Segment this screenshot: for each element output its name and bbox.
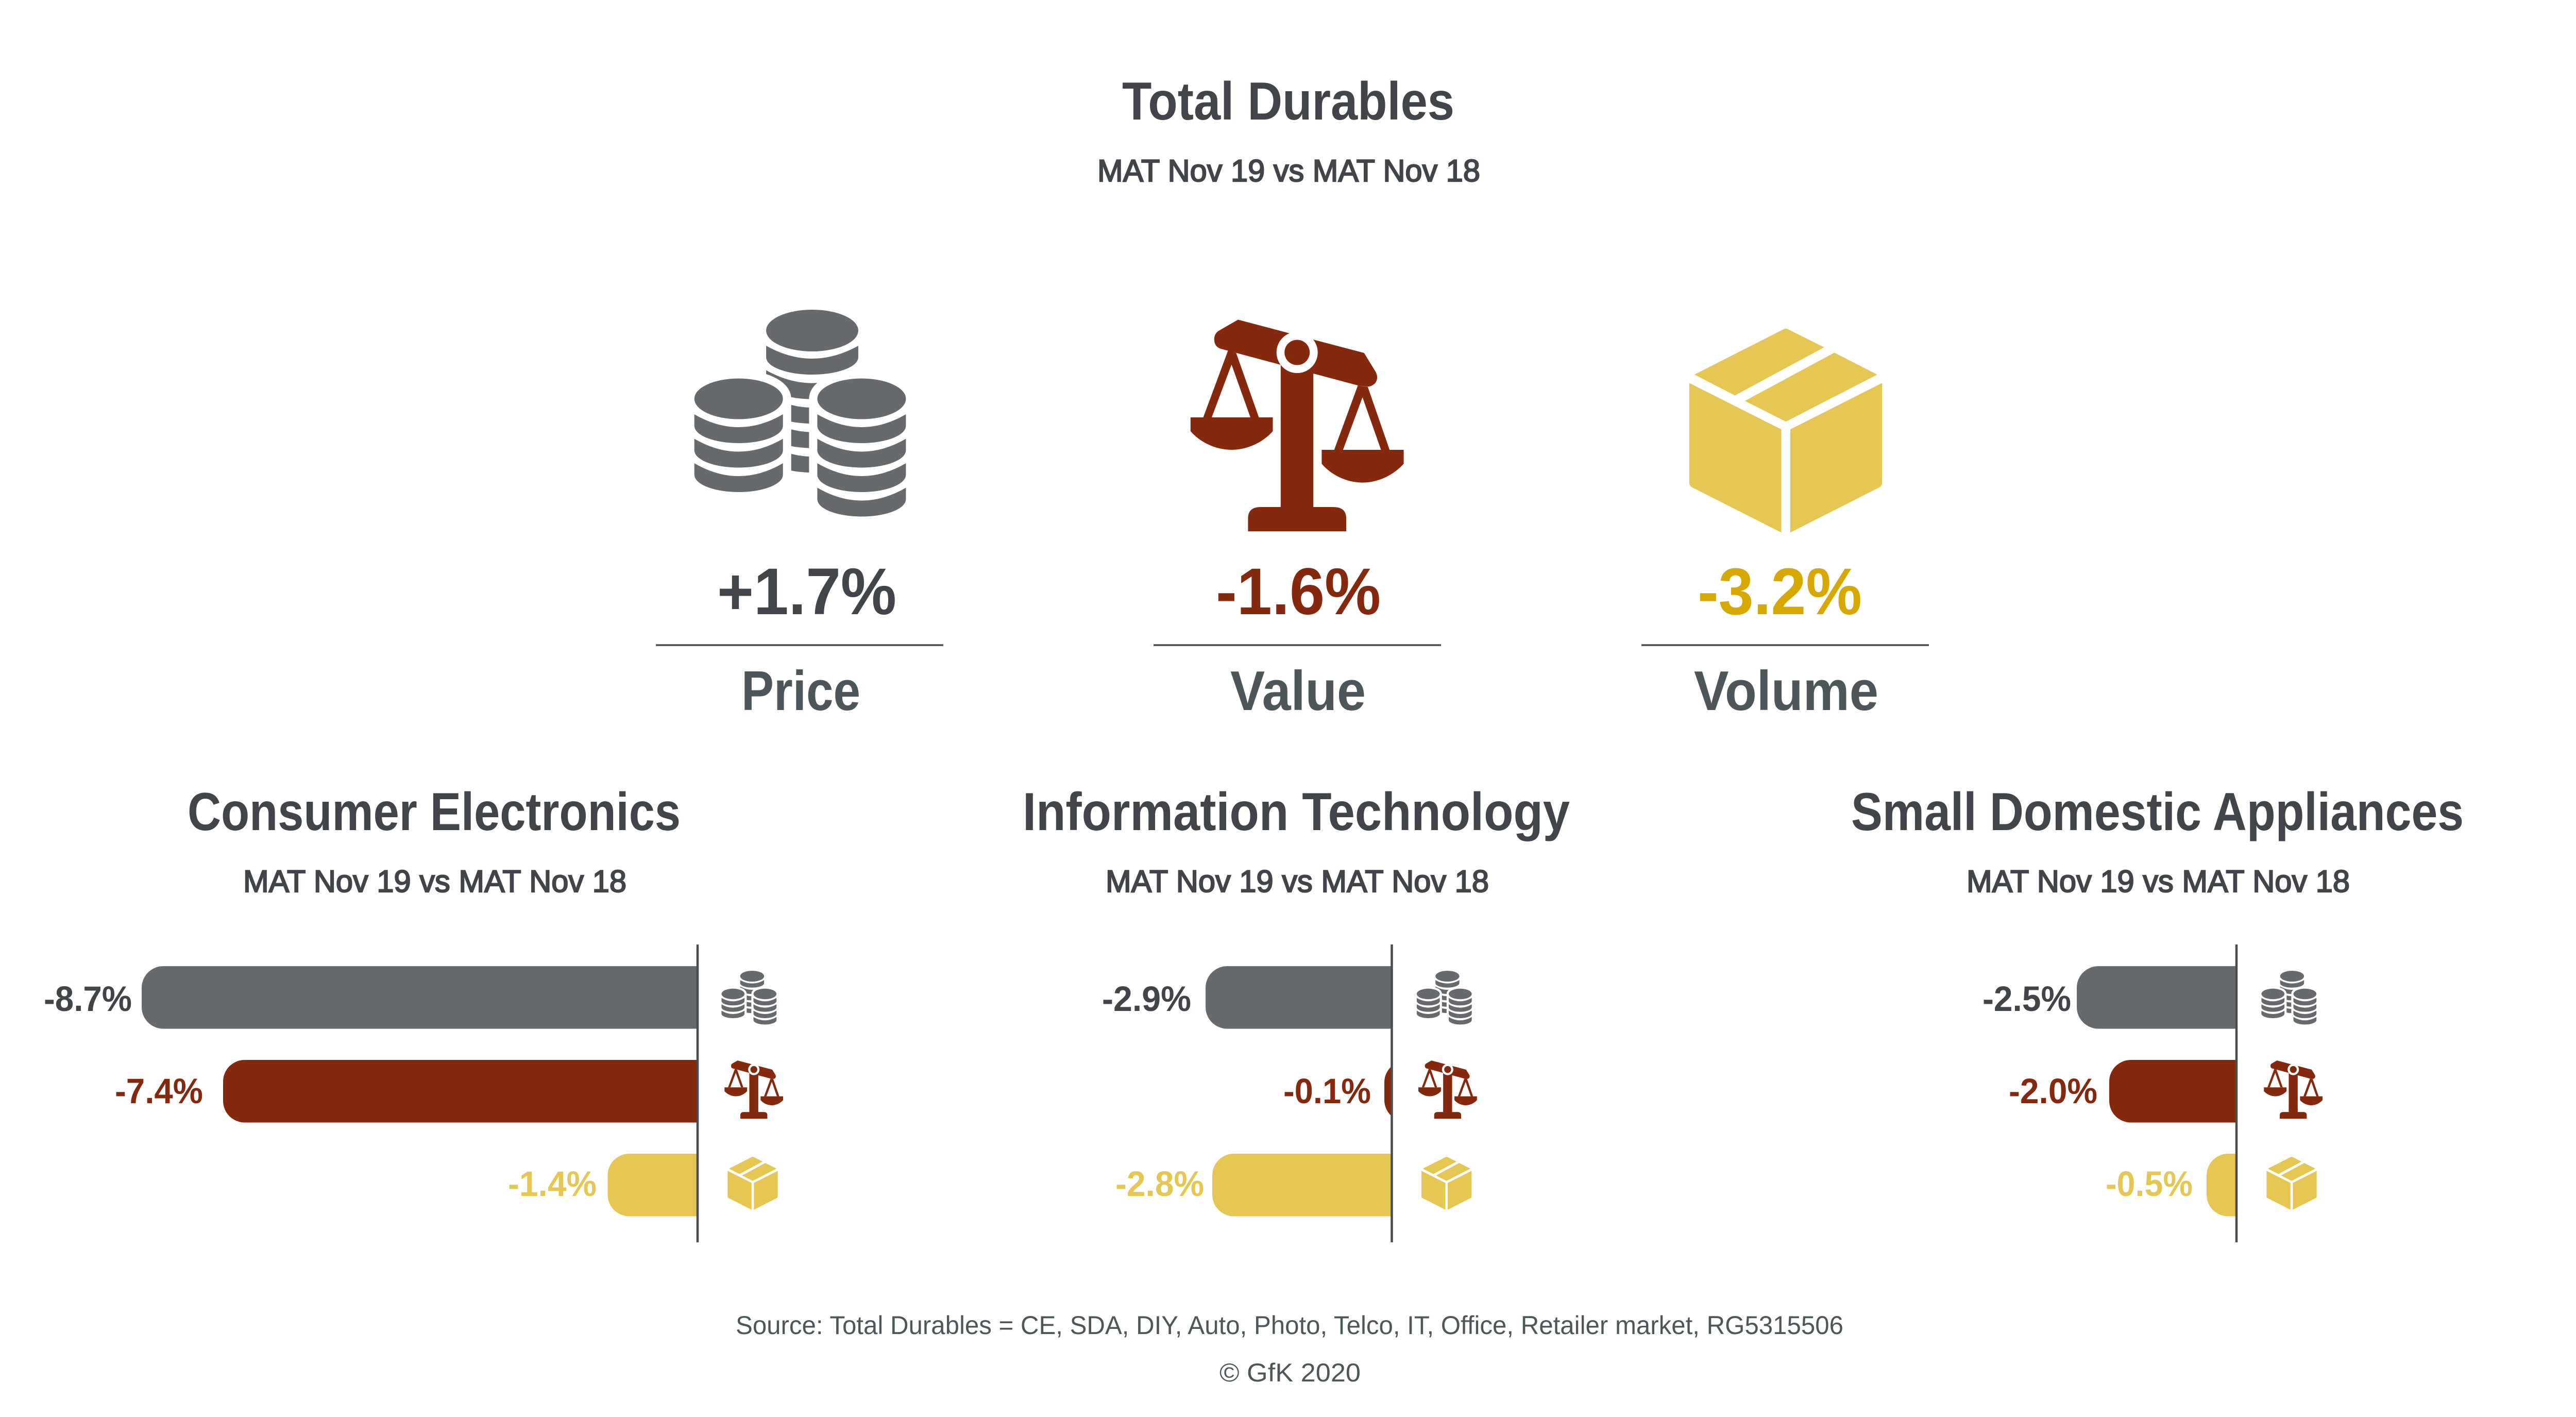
axis — [1391, 944, 1393, 1242]
bar: volume -2.8% — [1212, 1154, 1392, 1216]
label: -8.7%: -8.7% — [44, 979, 132, 1019]
price label: Price — [741, 660, 860, 722]
label: -2.0%: -2.0% — [2009, 1071, 2097, 1111]
title: Total Durables — [1122, 72, 1454, 131]
subtitle: MAT Nov 19 vs MAT Nov 18 — [1097, 154, 1480, 188]
panel: price KPI — [656, 310, 943, 722]
heading: small domestic appliances: Small Domestic Appliances — [1851, 782, 2464, 842]
value figure: -1.6% — [1216, 555, 1381, 629]
icon: box — [1421, 1157, 1471, 1210]
panel: consumer electronics — [44, 782, 783, 1242]
label: -2.8%: -2.8% — [1115, 1164, 1204, 1204]
axis — [2235, 944, 2238, 1242]
label: -0.5%: -0.5% — [2106, 1164, 2193, 1204]
subheading: MAT Nov 19 vs MAT Nov 18 — [243, 864, 626, 899]
icon: scales — [2264, 1060, 2323, 1119]
label: -1.4%: -1.4% — [508, 1164, 597, 1204]
icon: scales — [1191, 319, 1404, 531]
icon: coins — [721, 971, 776, 1024]
copyright: © GfK 2020 — [1219, 1358, 1361, 1387]
icon: scales — [1418, 1060, 1477, 1119]
bar: value -7.4% — [223, 1060, 698, 1122]
bar: price -2.9% — [1206, 966, 1392, 1028]
panel: information technology — [1023, 782, 1570, 1242]
icon: coins — [2261, 971, 2316, 1024]
icon: box — [727, 1157, 778, 1210]
bar: volume -0.5% — [2207, 1154, 2236, 1216]
panel: small domestic appliances — [1851, 782, 2464, 1242]
heading: information technology: Information Technology — [1023, 782, 1570, 842]
bar: volume -1.4% — [608, 1154, 698, 1216]
bar: price -8.7% — [142, 966, 698, 1028]
bar: value -0.1% — [1384, 1066, 1392, 1116]
icon: coins — [1417, 971, 1472, 1024]
subheading: MAT Nov 19 vs MAT Nov 18 — [1967, 864, 2350, 899]
heading: consumer electronics: Consumer Electronics — [188, 782, 681, 842]
volume figure: -3.2% — [1698, 555, 1862, 629]
label: -0.1%: -0.1% — [1283, 1071, 1371, 1111]
subheading: MAT Nov 19 vs MAT Nov 18 — [1106, 864, 1489, 899]
icon: box — [1689, 329, 1882, 533]
value label: Value — [1230, 660, 1366, 722]
bar: value -2.0% — [2109, 1060, 2236, 1122]
label: -7.4%: -7.4% — [115, 1071, 203, 1111]
icon: coins — [694, 310, 906, 516]
icon: scales — [724, 1060, 783, 1119]
icon: box — [2266, 1157, 2317, 1210]
source note: Source: Total Durables = CE, SDA, DIY, Auto, Photo, Telco, IT, Office, Retailer market, RG5315506 — [736, 1311, 1843, 1340]
bar: price -2.5% — [2077, 966, 2236, 1028]
panel: volume KPI — [1641, 329, 1929, 722]
axis — [697, 944, 699, 1242]
price value: +1.7% — [717, 555, 896, 629]
volume label: Volume — [1694, 660, 1878, 722]
label: -2.5%: -2.5% — [1982, 979, 2071, 1019]
label: -2.9%: -2.9% — [1102, 979, 1191, 1019]
panel: value KPI — [1154, 319, 1441, 722]
